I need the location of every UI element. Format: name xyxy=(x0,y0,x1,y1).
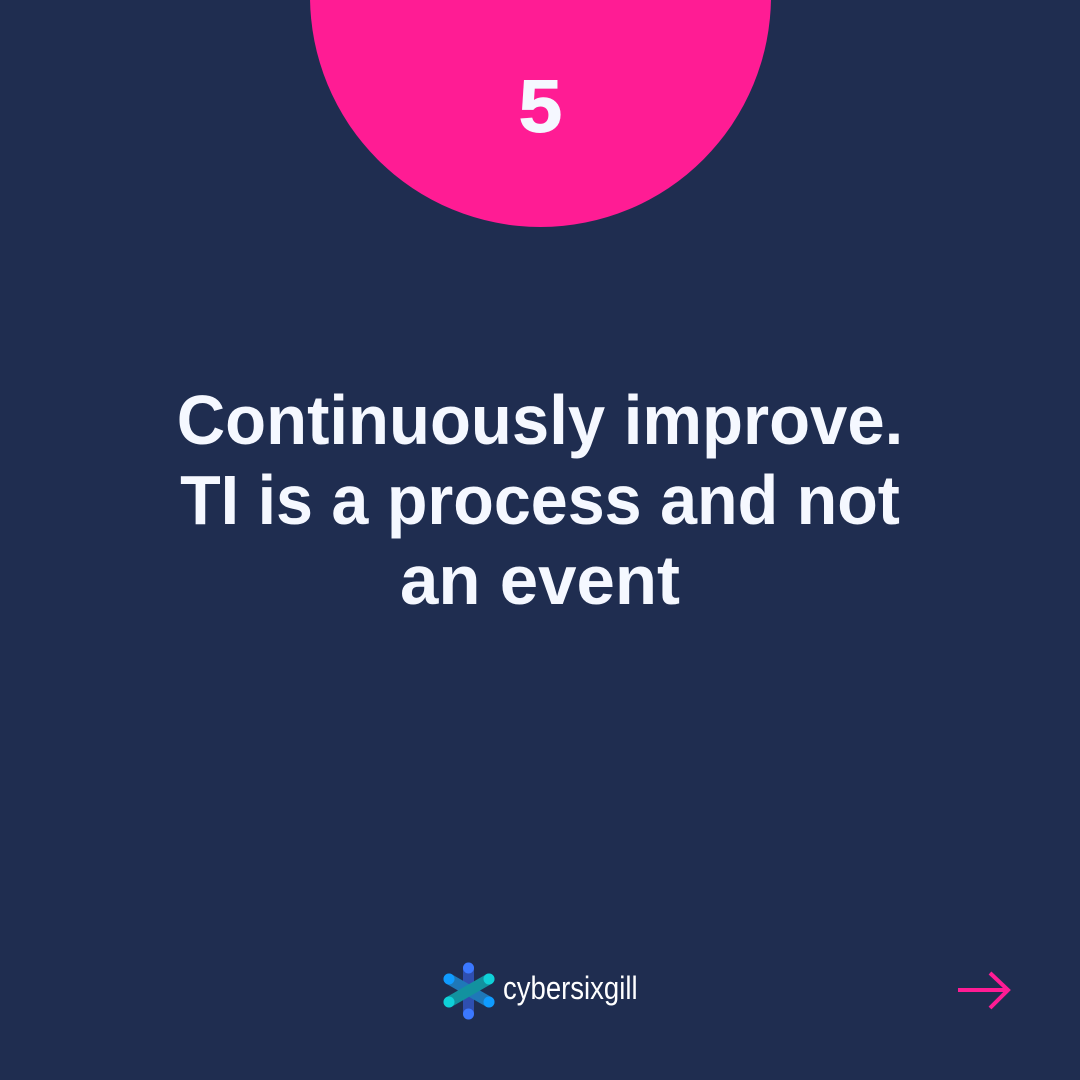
step number: 5 xyxy=(519,65,562,148)
logo wordmark: cybersixgill xyxy=(503,970,638,1006)
pink circle with number xyxy=(310,0,771,227)
heading: an event xyxy=(400,541,680,619)
icon: next arrow xyxy=(958,972,1011,1010)
heading: TI is a process and not xyxy=(180,461,900,539)
heading xyxy=(177,381,903,619)
heading: Continuously improve. xyxy=(177,381,903,459)
icon: logo mark xyxy=(444,962,494,1020)
logo: cybersixgill xyxy=(444,962,638,1020)
